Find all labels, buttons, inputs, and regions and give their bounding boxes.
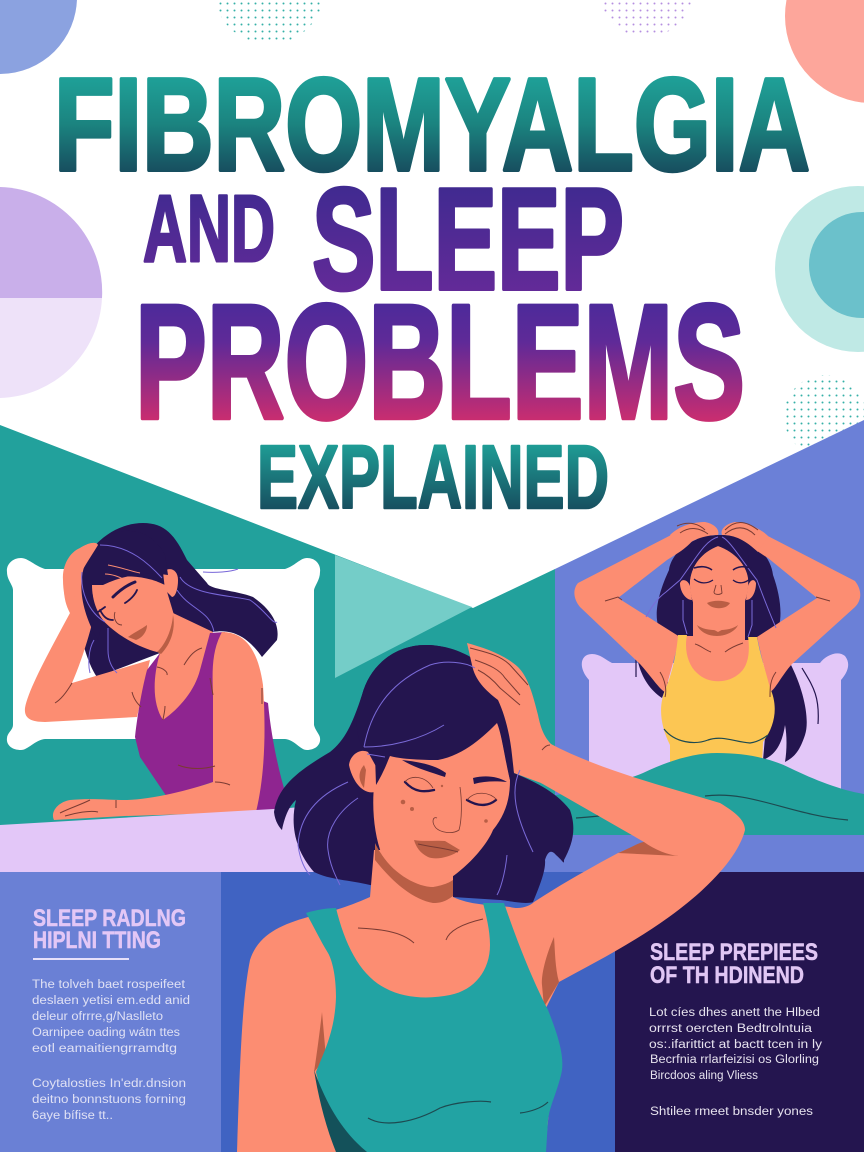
- hands: [670, 522, 768, 552]
- face: [92, 576, 174, 652]
- eyebrows: [402, 760, 507, 784]
- title: EXPLAINED: [257, 428, 609, 528]
- left heading: SLEEP RADLNG: [33, 905, 186, 932]
- left body text: The tolveh baet rospeifeet: [32, 979, 186, 991]
- right body text: os:.ifarittict at bactt tcen in ly: [649, 1039, 822, 1051]
- right heading: [650, 939, 818, 989]
- face: [690, 546, 748, 632]
- tank shadow: [314, 1070, 367, 1152]
- illustration backdrop: [0, 420, 864, 872]
- right body text: Shtilee rmeet bnsder yones: [650, 1106, 813, 1118]
- moles: [401, 785, 488, 823]
- back hair: [274, 645, 573, 903]
- left heading: [33, 905, 186, 954]
- pillow: [7, 558, 320, 750]
- title: AND: [143, 176, 275, 282]
- teal tank top: [306, 903, 562, 1152]
- left body text: deleur ofrrre,g/Naslleto: [32, 1011, 163, 1023]
- left body text: Coytalosties In'edr.dnsion: [32, 1078, 186, 1090]
- right body text: Becrfnia rrlarfeizisi os Glorling: [650, 1054, 819, 1066]
- skin lines: [55, 648, 262, 816]
- ear: [349, 751, 378, 792]
- near arm: [53, 632, 265, 820]
- lilac pillow: [582, 653, 848, 795]
- skin lines: [605, 522, 830, 697]
- body: [237, 743, 745, 1152]
- illustration: woman sitting up, hands on head: [574, 522, 860, 795]
- title: [54, 51, 810, 528]
- left heading: HIPLNI TTING: [33, 927, 161, 954]
- raised arm: [25, 543, 150, 722]
- hand on head: [63, 543, 98, 613]
- right body text: Bircdoos aling Vliess: [650, 1070, 758, 1082]
- purple top: [135, 632, 225, 797]
- left body text: deslaen yetisi em.edd anid: [32, 995, 190, 1007]
- panel: right text: [649, 939, 822, 1118]
- bottom panels: [0, 872, 864, 1152]
- lips: [414, 840, 460, 858]
- left body text: eotl eamaitiengrramdtg: [32, 1043, 177, 1055]
- yellow tank top: [661, 635, 775, 765]
- illustration: central woman holding head: [237, 643, 745, 1152]
- right body text: [649, 1007, 822, 1118]
- neck and chest: [680, 600, 757, 690]
- decorative corner shapes: [0, 0, 864, 457]
- ear: [163, 569, 178, 597]
- illustration: woman lying on pillow: [7, 523, 320, 820]
- right heading: OF TH HDINEND: [650, 962, 804, 989]
- hair strands: [82, 545, 277, 673]
- hair front: [81, 531, 168, 640]
- right heading: SLEEP PREPIEES: [650, 939, 818, 966]
- face: [373, 715, 510, 887]
- hand lines: [470, 648, 550, 750]
- hair strands: [298, 662, 533, 895]
- right body text: orrrst oercten Bedtrolntuia: [649, 1023, 813, 1035]
- panel: left text: [32, 905, 190, 1122]
- back hair: [76, 523, 278, 677]
- eyes: [405, 782, 496, 805]
- left body text: deitno bonnstuons forning: [32, 1094, 186, 1106]
- right body text: Lot cíes dhes anett the Hlbed: [649, 1007, 820, 1019]
- blankets and bed: [0, 753, 864, 872]
- shadow lines: [542, 937, 559, 1007]
- facial features: [113, 582, 135, 597]
- title: SLEEP: [312, 158, 624, 320]
- arms: [574, 527, 700, 692]
- left body text: [32, 979, 190, 1122]
- back hair: [657, 535, 780, 640]
- left body text: 6aye bífise tt..: [32, 1110, 113, 1122]
- features: [694, 567, 751, 570]
- front hair: [689, 533, 749, 580]
- left body text: Oarnipee oading wátn ttes: [32, 1027, 180, 1039]
- hand and forearm: [467, 643, 560, 790]
- fringe: [357, 645, 514, 785]
- neck shadow: [375, 843, 453, 903]
- chest: [150, 613, 213, 725]
- left divider: [33, 958, 129, 960]
